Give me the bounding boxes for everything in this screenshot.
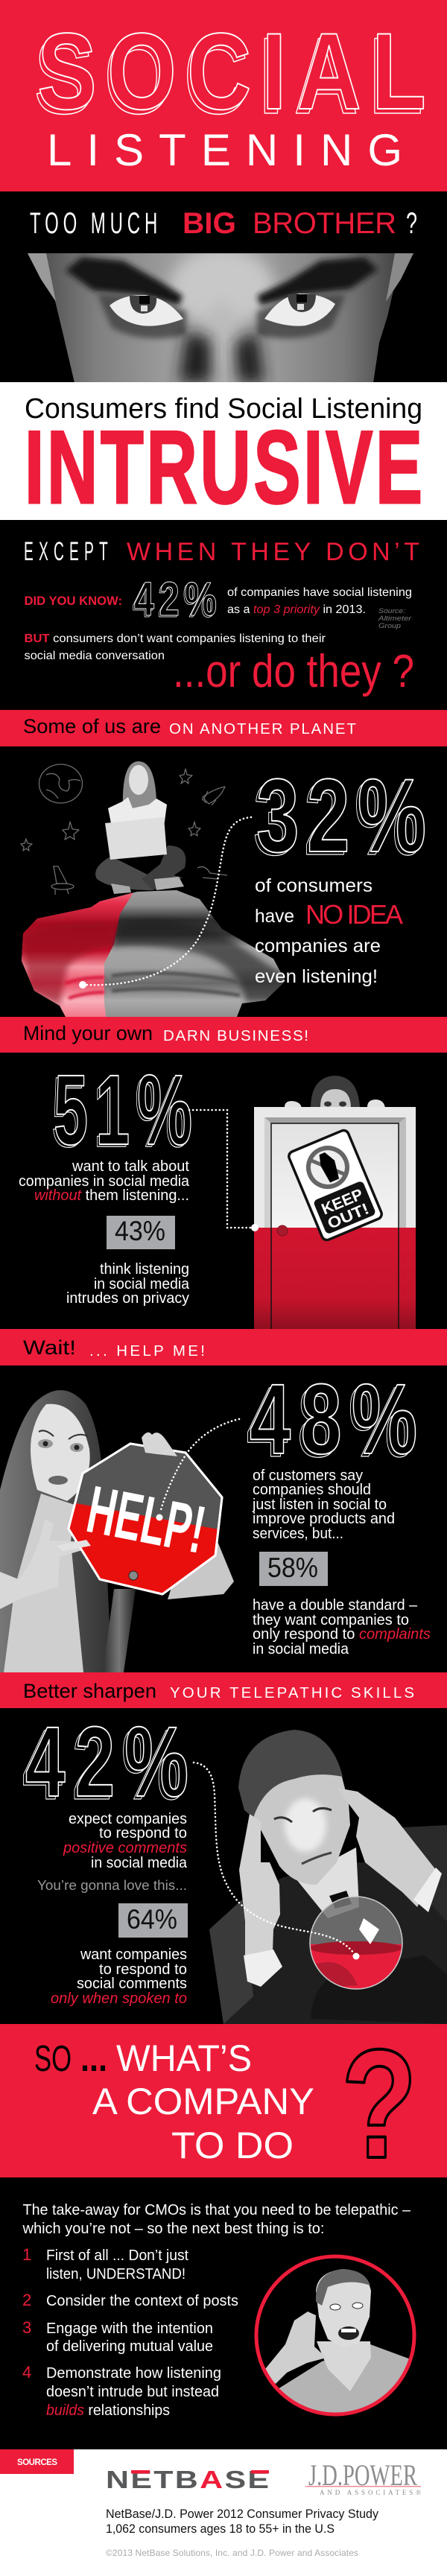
hand on sign (142, 1433, 177, 1456)
text: double standard: have a double standard – (253, 1597, 418, 1614)
panel: telepathic skills (22, 1705, 447, 2024)
source note (378, 607, 412, 630)
stop sign (67, 1442, 224, 1596)
heading: what's a company to do: WHAT’S (116, 2037, 252, 2079)
text: intrudes on privacy: intrudes on privacy (66, 1290, 189, 1307)
connector endpoint (156, 1514, 162, 1521)
list item 4: 4 (22, 2363, 31, 2382)
panel: darn business (19, 1054, 416, 1329)
stat box: 58 percent: 58% (267, 1552, 318, 1583)
priority text: as a top 3 priority in 2013. (227, 603, 366, 616)
or do they: ...or do they ? (173, 646, 414, 697)
heading: too much big brother: BIG (183, 207, 236, 240)
source text: NetBase/J.D. Power 2012 Consumer Privacy Study (106, 2507, 378, 2521)
panel: takeaway (22, 2202, 425, 2419)
text: only when spoken to (51, 1947, 187, 2007)
stat: 42 percent: 42% (25, 1705, 198, 1818)
panel: sources (0, 2449, 447, 2576)
doodles: space (21, 764, 227, 895)
neck (317, 2341, 371, 2391)
pointing hand (57, 1540, 91, 1551)
text: just listen: just listen in social to (252, 1497, 387, 1513)
heading: what's a company to do (92, 2037, 314, 2166)
intro text (22, 2202, 411, 2237)
text: only when spoken to: to respond to (99, 1961, 187, 1978)
heading: except when they don't (24, 536, 419, 566)
list item 4: Demonstrate how listening (46, 2365, 221, 2382)
heading: consumers find social listening: Consumers find Social Listening (25, 393, 422, 425)
heading: so: SO (34, 2039, 72, 2079)
heading: too much big brother: TOO MUCH (30, 206, 162, 239)
list item 4: doesn’t intrude but instead (46, 2384, 219, 2400)
aside: you're gonna love this: You’re gonna love this... (37, 1878, 187, 1893)
but consumers text: social media conversation (24, 650, 165, 662)
text: positive comments: positive comments (63, 1840, 187, 1856)
stat: 42 percent: 42% (134, 574, 222, 626)
title: listening: LISTENING (47, 125, 402, 175)
text: no idea (255, 875, 403, 987)
list item 4: builds relationships (46, 2402, 170, 2419)
list item 1 (22, 2245, 188, 2282)
connector endpoint (79, 981, 86, 989)
hair (238, 1730, 343, 1818)
band: another planet (0, 710, 447, 746)
shirt (279, 2344, 409, 2412)
text: only when spoken to: only when spoken to (51, 1990, 187, 2007)
head (253, 1774, 350, 1885)
panel: what's a company to do (0, 2018, 447, 2191)
dotted connector (194, 1763, 354, 1953)
heading: what's a company to do: A COMPANY (92, 2081, 314, 2122)
text: positive comments: to respond to (99, 1825, 187, 1841)
did you know label: DID YOU KNOW: (24, 594, 122, 608)
panel: another planet (0, 758, 434, 1021)
text: intrudes on privacy (66, 1261, 190, 1307)
band: another planet: Some of us are (23, 715, 161, 737)
band: telepathic skills: Better sharpen (23, 1680, 156, 1702)
heading: except when they don't: EXCEPT (24, 536, 113, 565)
text: without listening: want to talk about (72, 1158, 189, 1175)
heading: intrusive: INTRUSIVE (25, 410, 425, 525)
band: telepathic skills: YOUR TELEPATHIC SKILLS (170, 1684, 414, 1701)
list item 4 (22, 2363, 221, 2419)
band: help me (0, 1329, 447, 1365)
logo: j.d. power: AND ASSOCIATES® (320, 2489, 421, 2496)
text: double standard: they want companies to (253, 1612, 409, 1628)
text: no idea: companies are (255, 936, 381, 957)
text: no idea: of consumers (255, 875, 372, 896)
heading: too much big brother: ? (406, 207, 417, 240)
photo: woman listening in ring (253, 2256, 425, 2417)
text: no idea: even listening! (255, 966, 378, 987)
stat box: 64 percent: 64% (127, 1904, 177, 1935)
list item 2: 2 (22, 2291, 31, 2309)
text: no idea: have (255, 906, 294, 927)
door connector endpoint (251, 1224, 259, 1231)
title: social: SOCIAL (34, 16, 434, 137)
stat: 48 percent: 48% (247, 1365, 424, 1477)
text: only when spoken to: social comments (77, 1976, 187, 1992)
text: positive comments: in social media (91, 1855, 188, 1871)
logo: netbase: NETBASE (106, 2466, 270, 2494)
heading: except when they don't: WHEN THEY DON’T (127, 538, 419, 566)
text: just listen: services, but... (253, 1526, 343, 1542)
text: intrudes on privacy: think listening (100, 1261, 189, 1278)
panel: big brother (28, 206, 417, 383)
priority text: of companies have social listening (227, 586, 412, 599)
heading: what's a company to do: TO DO (171, 2125, 294, 2166)
panel: help me (0, 1362, 431, 1672)
photo: woman with laptop (95, 761, 186, 894)
priority text (227, 586, 412, 616)
sources tab (0, 2449, 74, 2474)
stat: 32 percent: 32% (253, 761, 431, 878)
panel: title (0, 0, 447, 191)
illustration: door (251, 1107, 416, 1329)
stat: 32 percent: 32% (256, 758, 434, 875)
band: another planet: ON ANOTHER PLANET (169, 720, 356, 737)
heading: too much big brother (30, 206, 417, 240)
list item 3: of delivering mutual value (46, 2338, 213, 2355)
band: darn business: DARN BUSINESS! (163, 1027, 308, 1044)
text: without listening: without them listening... (34, 1187, 189, 1204)
source text (106, 2507, 378, 2536)
shirt collar (297, 1847, 359, 1918)
source note: Group (378, 622, 401, 630)
crystal ball (309, 1896, 403, 1990)
stop sign pole (103, 1589, 136, 1672)
text: positive comments (63, 1811, 188, 1871)
list item 1: First of all ... Don’t just (46, 2247, 188, 2264)
copyright: ©2013 NetBase Solutions, Inc. and J.D. Power and Associates (106, 2548, 358, 2558)
text: just listen: companies should (253, 1482, 371, 1498)
text: no idea: NO IDEA (305, 899, 403, 930)
head (316, 2269, 371, 2348)
list item 2: Consider the context of posts (46, 2293, 238, 2309)
stat: 42 percent: 42% (22, 1708, 195, 1821)
band: help me: ... HELP ME! (89, 1342, 205, 1360)
text: intrudes on privacy: in social media (94, 1276, 190, 1292)
text: double standard: only respond to complaints (253, 1626, 431, 1643)
list item 1: 1 (22, 2245, 31, 2264)
band: darn business: Mind your own (23, 1022, 153, 1044)
but consumers text (24, 632, 326, 662)
photo: girl peeking (285, 1076, 385, 1113)
panel: consumers find it intrusive (0, 382, 447, 525)
band: help me: Wait! (23, 1336, 76, 1359)
sign: keep out: OUT! (325, 1200, 372, 1233)
sign: keep out (288, 1129, 383, 1242)
panel: except when they don't (24, 536, 419, 697)
icon: question mark: ? (341, 2018, 417, 2191)
photo: woman with stop sign (0, 1390, 234, 1672)
intro text: The take-away for CMOs is that you need to be telepathic – (22, 2202, 411, 2218)
cloth (311, 1955, 447, 2024)
text: without listening (19, 1158, 190, 1204)
illustration: planet (22, 890, 285, 1017)
text: just listen (252, 1468, 395, 1542)
source note: Altimeter (378, 615, 412, 623)
text: double standard (253, 1597, 431, 1657)
stat: 48 percent: 48% (250, 1362, 427, 1474)
sign: keep out: KEEP (319, 1186, 366, 1218)
photo: man with crystal ball (209, 1730, 447, 2024)
text: just listen: improve products and (253, 1511, 395, 1527)
dotted connector (189, 1110, 252, 1228)
source text: 1,062 consumers ages 18 to 55+ in the U.S (106, 2522, 335, 2536)
title: social: SOCIAL (37, 11, 437, 133)
source note: Source: (378, 607, 405, 615)
stat: 42 percent: 42% (133, 575, 221, 628)
stat box: 43 percent: 43% (115, 1216, 165, 1246)
left hand and forearm (239, 1814, 280, 1955)
hand (262, 2312, 326, 2384)
text: just listen: of customers say (253, 1468, 363, 1484)
chair (403, 1825, 447, 1922)
photo: staring eyes (28, 250, 413, 383)
stat: 51 percent: 51% (54, 1054, 200, 1166)
list item 3: 3 (22, 2318, 31, 2337)
sources tab: SOURCES (17, 2458, 57, 2467)
stop sign: HELP! (81, 1472, 211, 1568)
but consumers text: BUT consumers don’t want companies listening to their (24, 632, 326, 645)
stat: 51 percent: 51% (51, 1056, 197, 1168)
connector endpoint (353, 1953, 359, 1959)
heading: so: ... (80, 2039, 107, 2079)
band: telepathic skills (0, 1672, 447, 1708)
list item 3 (22, 2318, 213, 2355)
list item 1: listen, UNDERSTAND! (46, 2266, 186, 2282)
text: double standard: in social media (253, 1641, 349, 1657)
heading: too much big brother: BROTHER (253, 207, 396, 240)
eye sockets (97, 294, 186, 338)
text: positive comments: expect companies (69, 1811, 187, 1827)
suit (209, 1862, 447, 2024)
band: darn business (0, 1017, 447, 1053)
intro text: which you’re not – so the next best thing is to: (22, 2221, 324, 2237)
dotted connector (160, 1419, 239, 1512)
right hand and forearm (345, 1789, 435, 1907)
eyebrows (66, 257, 183, 305)
dotted connector (86, 817, 251, 985)
text: without listening: companies in social media (19, 1173, 190, 1190)
text: only when spoken to: want companies (80, 1947, 187, 1963)
eyes (110, 295, 183, 326)
list item 3: Engage with the intention (46, 2320, 213, 2337)
